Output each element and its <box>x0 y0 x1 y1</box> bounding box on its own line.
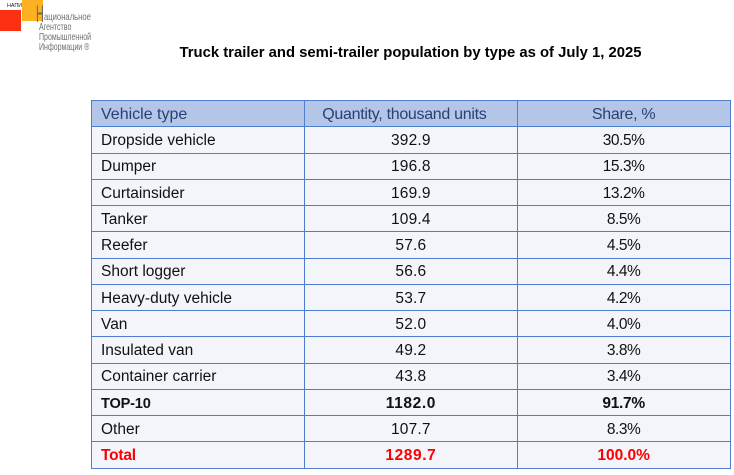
logo: orange square <box>22 0 43 21</box>
row: dropside vehicle <box>92 127 730 153</box>
row: curtainsider: Curtainsider <box>101 185 185 202</box>
logo: abbreviation: НАПИ <box>7 3 22 9</box>
row: tanker: Tanker <box>101 211 148 228</box>
row: dropside vehicle: 30.5% <box>603 132 644 149</box>
row: dumper: 196.8 <box>391 158 431 175</box>
row: tanker: 109.4 <box>391 211 431 228</box>
table header: Vehicle type <box>101 106 187 123</box>
row: insulated van <box>92 337 730 363</box>
row: dropside vehicle: Dropside vehicle <box>101 132 216 149</box>
row: curtainsider: 13.2% <box>603 185 644 202</box>
row: top-10 subtotal: 1182.0 <box>386 395 436 412</box>
row: reefer: Reefer <box>101 237 148 254</box>
table header: Quantity, thousand units <box>322 106 486 123</box>
row: total: 1289.7 <box>385 447 436 464</box>
row: reefer <box>92 232 730 258</box>
row: curtainsider <box>92 180 730 205</box>
row: other: 107.7 <box>391 421 431 438</box>
data table <box>91 100 731 469</box>
row: top-10 subtotal: 91.7% <box>602 395 645 412</box>
logo: agency name: Промышленной <box>39 31 91 43</box>
row: total: Total <box>101 447 136 464</box>
row: top-10 subtotal: TOP-10 <box>101 396 151 412</box>
row: container carrier: 3.4% <box>607 368 640 385</box>
logo: agency name: ациональное <box>44 11 90 23</box>
row: heavy-duty vehicle <box>92 285 730 310</box>
row: van <box>92 311 730 336</box>
logo <box>0 0 91 53</box>
row: insulated van: 49.2 <box>395 342 426 359</box>
table header <box>92 101 730 468</box>
logo: red square <box>0 10 21 31</box>
row: heavy-duty vehicle: 4.2% <box>607 290 640 307</box>
row: reefer: 4.5% <box>607 237 640 254</box>
row: other <box>92 416 730 441</box>
logo: agency name <box>39 11 91 53</box>
logo: agency name: Агентство <box>39 21 71 33</box>
row: reefer: 57.6 <box>395 237 426 254</box>
row: top-10 subtotal <box>92 390 730 415</box>
row: container carrier: Container carrier <box>101 368 216 385</box>
row: other: Other <box>101 421 140 438</box>
row: dumper <box>92 154 730 179</box>
row: short logger: 4.4% <box>607 263 640 280</box>
row: insulated van: 3.8% <box>607 342 640 359</box>
row: van: Van <box>101 316 127 333</box>
row: tanker <box>92 206 730 231</box>
logo: agency name: Информации ® <box>39 41 89 53</box>
row: dumper: 15.3% <box>603 158 644 175</box>
row: short logger: Short logger <box>101 263 185 280</box>
row: curtainsider: 169.9 <box>391 185 431 202</box>
row: heavy-duty vehicle: Heavy-duty vehicle <box>101 290 232 307</box>
row: dumper: Dumper <box>101 158 156 175</box>
row: total <box>92 442 730 468</box>
row: container carrier: 43.8 <box>395 368 426 385</box>
row: total: 100.0% <box>597 447 650 464</box>
row: van: 4.0% <box>607 316 640 333</box>
row: container carrier <box>92 364 730 389</box>
row: tanker: 8.5% <box>607 211 640 228</box>
logo: large initial: Н <box>36 1 44 28</box>
row: short logger: 56.6 <box>395 263 426 280</box>
row: other: 8.3% <box>607 421 640 438</box>
row: van: 52.0 <box>395 316 426 333</box>
table header: Share, % <box>592 106 655 123</box>
row: heavy-duty vehicle: 53.7 <box>395 290 426 307</box>
row: insulated van: Insulated van <box>101 342 193 359</box>
row: dropside vehicle: 392.9 <box>391 132 431 149</box>
title: Truck trailer and semi-trailer population by type as of July 1, 2025 <box>180 45 641 61</box>
row: short logger <box>92 259 730 284</box>
